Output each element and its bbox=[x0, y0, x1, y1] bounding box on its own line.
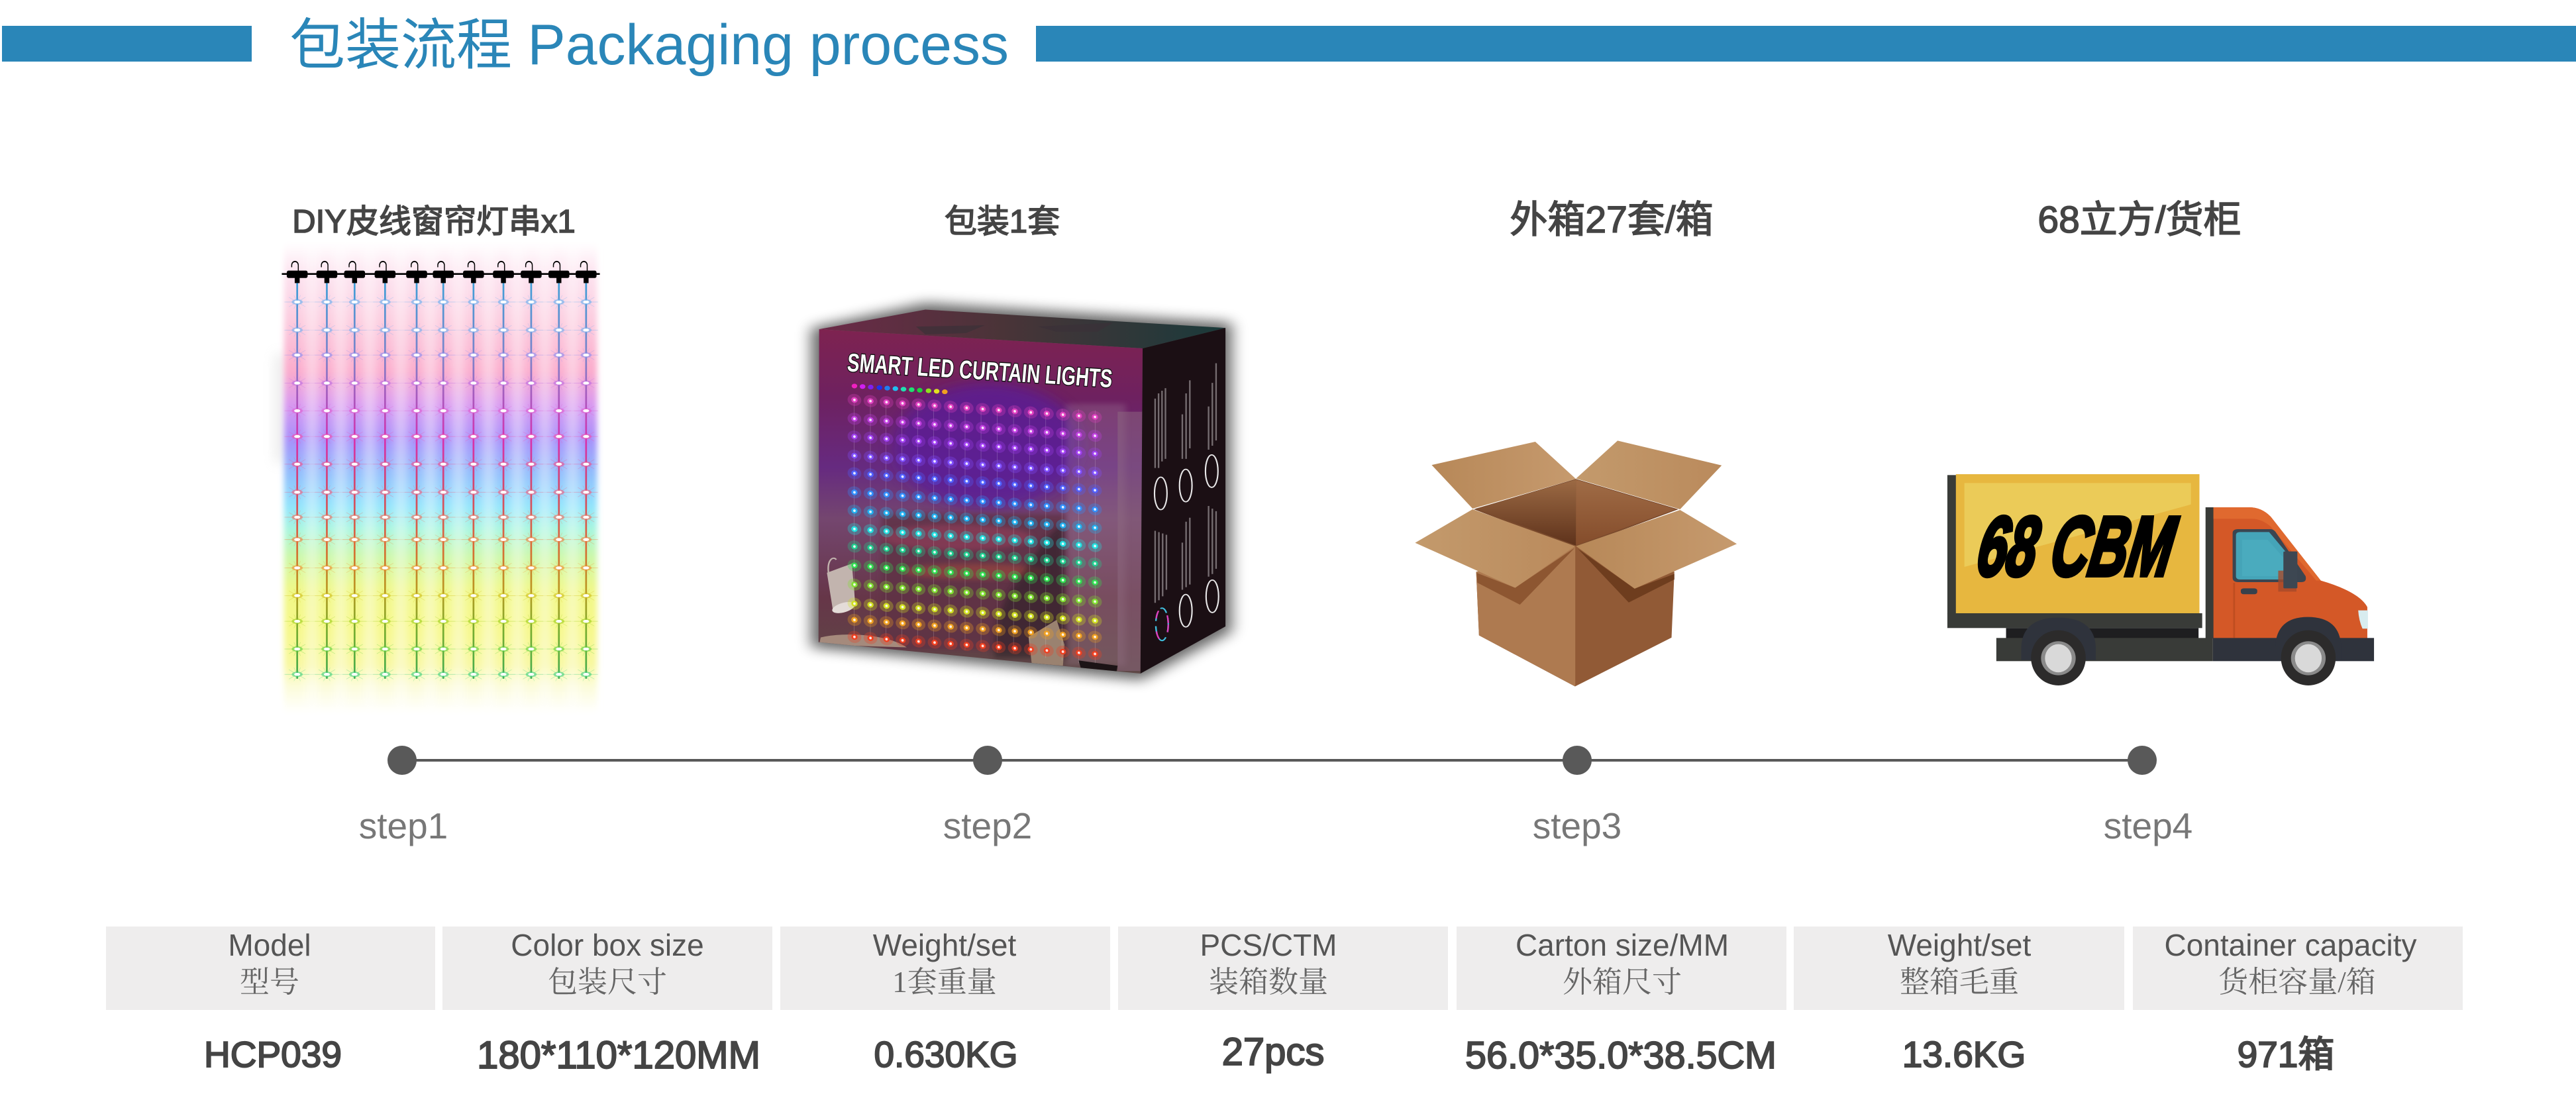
column: pcs per carton: 装箱数量 bbox=[1209, 966, 1328, 999]
step labels: step3 bbox=[1533, 805, 1622, 846]
column: carton weight: Weight/set bbox=[1888, 928, 2031, 962]
column: colour box size: 180*110*120MM bbox=[477, 1034, 760, 1077]
image: delivery truck bbox=[1947, 474, 2374, 685]
column: colour box size bbox=[477, 928, 760, 1077]
column: model: 型号 bbox=[240, 966, 299, 999]
column: weight per set: 1套重量 bbox=[892, 966, 997, 999]
column: container capacity: 971箱 bbox=[2238, 1034, 2334, 1075]
column: carton weight bbox=[1888, 928, 2031, 1075]
step 1 column: curtain lights bbox=[273, 204, 600, 713]
step labels bbox=[359, 805, 2192, 846]
step labels: step1 bbox=[359, 805, 448, 846]
column: model: HCP039 bbox=[204, 1034, 342, 1075]
heading: step 2: 包装1套 bbox=[945, 204, 1060, 240]
column: model: Model bbox=[228, 928, 311, 962]
column: carton weight: 整箱毛重 bbox=[1900, 966, 2019, 999]
step labels: step2 bbox=[943, 805, 1032, 846]
column: pcs per carton: PCS/CTM bbox=[1200, 928, 1337, 962]
column: carton size bbox=[1465, 928, 1777, 1077]
column: carton size: 外箱尺寸 bbox=[1563, 966, 1682, 999]
step 2 column: colour box bbox=[811, 204, 1232, 680]
step 3 column: carton bbox=[1415, 199, 1737, 687]
image: delivery truck: 68 CBM bbox=[1971, 500, 2183, 593]
step labels: step4 bbox=[2104, 805, 2192, 846]
column: pcs per carton: 27pcs bbox=[1222, 1030, 1324, 1074]
column: colour box size: 包装尺寸 bbox=[548, 966, 667, 999]
title banner bbox=[2, 13, 2576, 77]
heading: step 4: 68立方/货柜 bbox=[2037, 199, 2241, 241]
column: weight per set: Weight/set bbox=[873, 928, 1016, 962]
column: model bbox=[204, 928, 342, 1075]
column: carton weight: 13.6KG bbox=[1902, 1034, 2026, 1075]
header cells bbox=[106, 927, 2463, 1010]
specification table bbox=[106, 927, 2463, 1077]
column: pcs per carton bbox=[1200, 928, 1337, 1074]
column: colour box size: Color box size bbox=[511, 928, 704, 962]
title: 包装流程 Packaging process bbox=[289, 13, 1009, 77]
column: carton size: Carton size/MM bbox=[1516, 928, 1729, 962]
column: weight per set bbox=[873, 928, 1018, 1075]
heading: step 1: DIY皮线窗帘灯串x1 bbox=[292, 204, 576, 240]
timeline bbox=[359, 746, 2192, 846]
image: LED curtain string lights bbox=[273, 243, 600, 713]
box title text: SMART LED CURTAIN LIGHTS bbox=[846, 348, 1113, 393]
column: container capacity: Container capacity bbox=[2165, 928, 2416, 962]
column: weight per set: 0.630KG bbox=[874, 1034, 1018, 1075]
column: carton size: 56.0*35.0*38.5CM bbox=[1465, 1034, 1777, 1077]
step 4 column: truck bbox=[1947, 199, 2374, 685]
heading: step 3: 外箱27套/箱 bbox=[1510, 199, 1714, 241]
image: open cardboard carton bbox=[1415, 440, 1737, 687]
column: container capacity: 货柜容量/箱 bbox=[2218, 966, 2376, 999]
image: retail colour box bbox=[811, 303, 1232, 680]
column: container capacity bbox=[2165, 928, 2416, 1075]
step markers bbox=[387, 746, 2157, 775]
